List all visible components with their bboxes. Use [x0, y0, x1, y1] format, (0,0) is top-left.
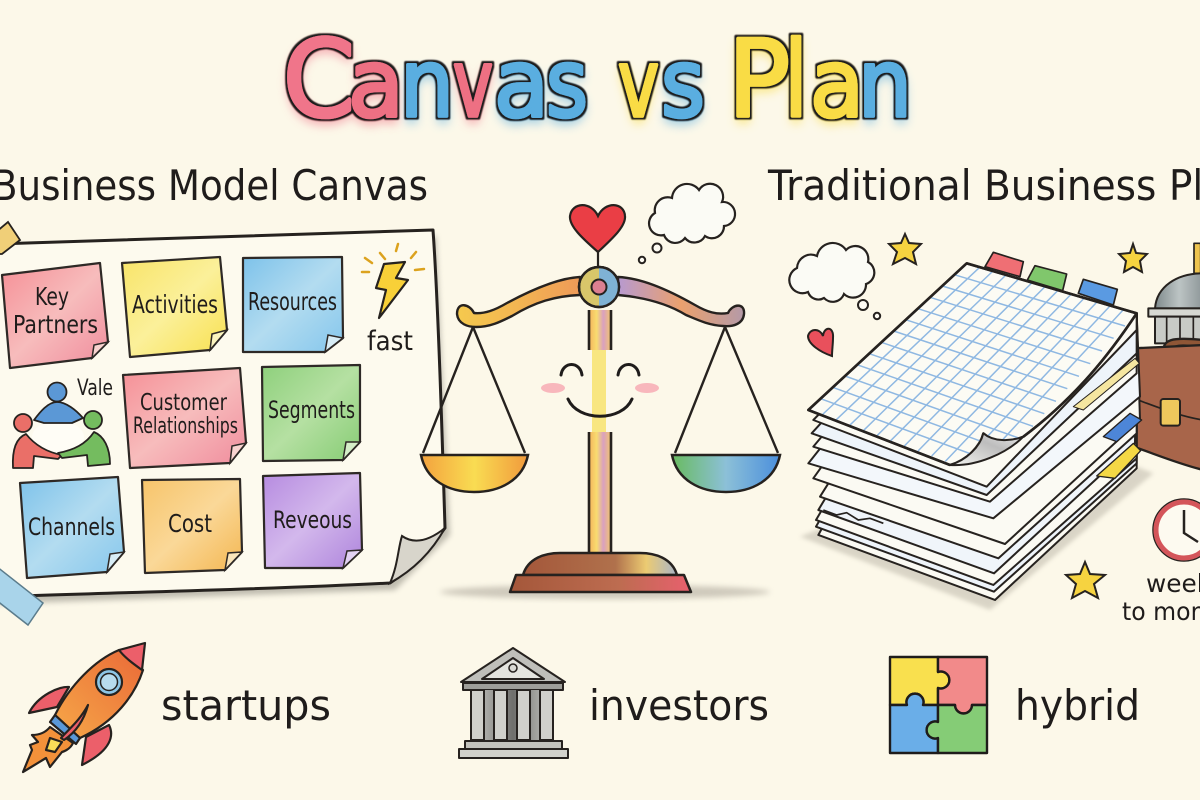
icon: bank building: [459, 648, 568, 758]
note: Cost: [142, 479, 242, 573]
top page with grid: [808, 263, 1137, 465]
icon: star right: [1119, 244, 1147, 272]
icon: pencil at top-left: [0, 222, 20, 254]
title: v: [453, 30, 493, 139]
base: [510, 553, 691, 592]
icon: people circle with Vale label: [13, 376, 113, 468]
note: Key Partners: Key: [35, 282, 69, 311]
scale: [421, 184, 780, 599]
tab: side yellow: [1097, 443, 1141, 478]
pivot: [579, 267, 619, 307]
note: Activities: Activities: [132, 290, 218, 319]
note: Resources: Resources: [248, 287, 337, 316]
label: startups: startups: [161, 681, 331, 730]
heading: Business Model Canvas: Business Model Canvas: [0, 161, 428, 210]
title: v: [618, 30, 659, 139]
title: l: [784, 19, 808, 141]
icon: small heart: [808, 329, 833, 356]
icon: puzzle: [890, 657, 987, 753]
icon: star: [889, 234, 921, 264]
briefcase: [1133, 339, 1200, 470]
text: weeks to months: [1122, 569, 1200, 626]
icon: ruler at bottom-left: [0, 566, 43, 625]
title: s: [546, 30, 588, 139]
cloud near stack: [789, 243, 880, 319]
icon: clock: [1153, 499, 1200, 561]
note: Channels: [20, 477, 124, 578]
icon: lightning fast: fast: [367, 326, 413, 357]
note: Revenues: [263, 473, 362, 568]
note: Customer Relationships: [123, 368, 246, 468]
title: a: [348, 30, 404, 139]
note: Channels: Channels: [28, 513, 115, 541]
scale shadow: [440, 585, 770, 599]
title: n: [858, 30, 912, 139]
icon: lightning fast: [362, 244, 424, 357]
title: [283, 18, 912, 141]
panel: canvas sheet: [0, 230, 450, 604]
tab: blue: [1078, 279, 1117, 305]
left pan: [421, 455, 528, 492]
note: Key Partners: Partners: [13, 310, 98, 339]
title: a: [494, 30, 549, 139]
label: hybrid: hybrid: [1015, 681, 1140, 730]
icon: people circle with Vale label: Vale: [77, 376, 113, 401]
building dome: [1148, 243, 1200, 343]
note: Segments: [262, 365, 360, 461]
title: C: [283, 18, 355, 141]
title: a: [810, 30, 864, 139]
paper stack: [800, 243, 1200, 610]
thought cloud: [639, 184, 735, 263]
tab: red: [985, 252, 1023, 277]
title: n: [400, 30, 454, 139]
tab: side paper yellow: [1073, 358, 1139, 410]
note: Key Partners: [2, 263, 108, 368]
post: [589, 310, 611, 554]
heart: [570, 205, 625, 252]
stack layers: [808, 263, 1140, 600]
tab: side blue: [1103, 413, 1142, 442]
stack shadow: [800, 467, 1153, 610]
note: Cost: Cost: [168, 509, 212, 538]
note: Customer Relationships: Customer: [140, 390, 227, 416]
title: s: [661, 30, 705, 139]
page curl: [950, 433, 1023, 465]
icon: rocket: [23, 643, 145, 772]
beam: [457, 277, 744, 327]
note: Revenues: Reveous: [273, 506, 352, 534]
note: Segments: Segments: [268, 396, 355, 424]
note: Activities: [122, 257, 227, 357]
label: investors: investors: [589, 681, 769, 730]
strings: [423, 327, 778, 453]
face: [541, 364, 659, 416]
right pan: [672, 455, 780, 492]
note: Resources: [243, 257, 343, 352]
icon: star bottom: [1066, 562, 1105, 598]
tab: green: [1027, 266, 1067, 291]
title: P: [728, 18, 790, 141]
note: Customer Relationships: Relationships: [133, 414, 238, 439]
